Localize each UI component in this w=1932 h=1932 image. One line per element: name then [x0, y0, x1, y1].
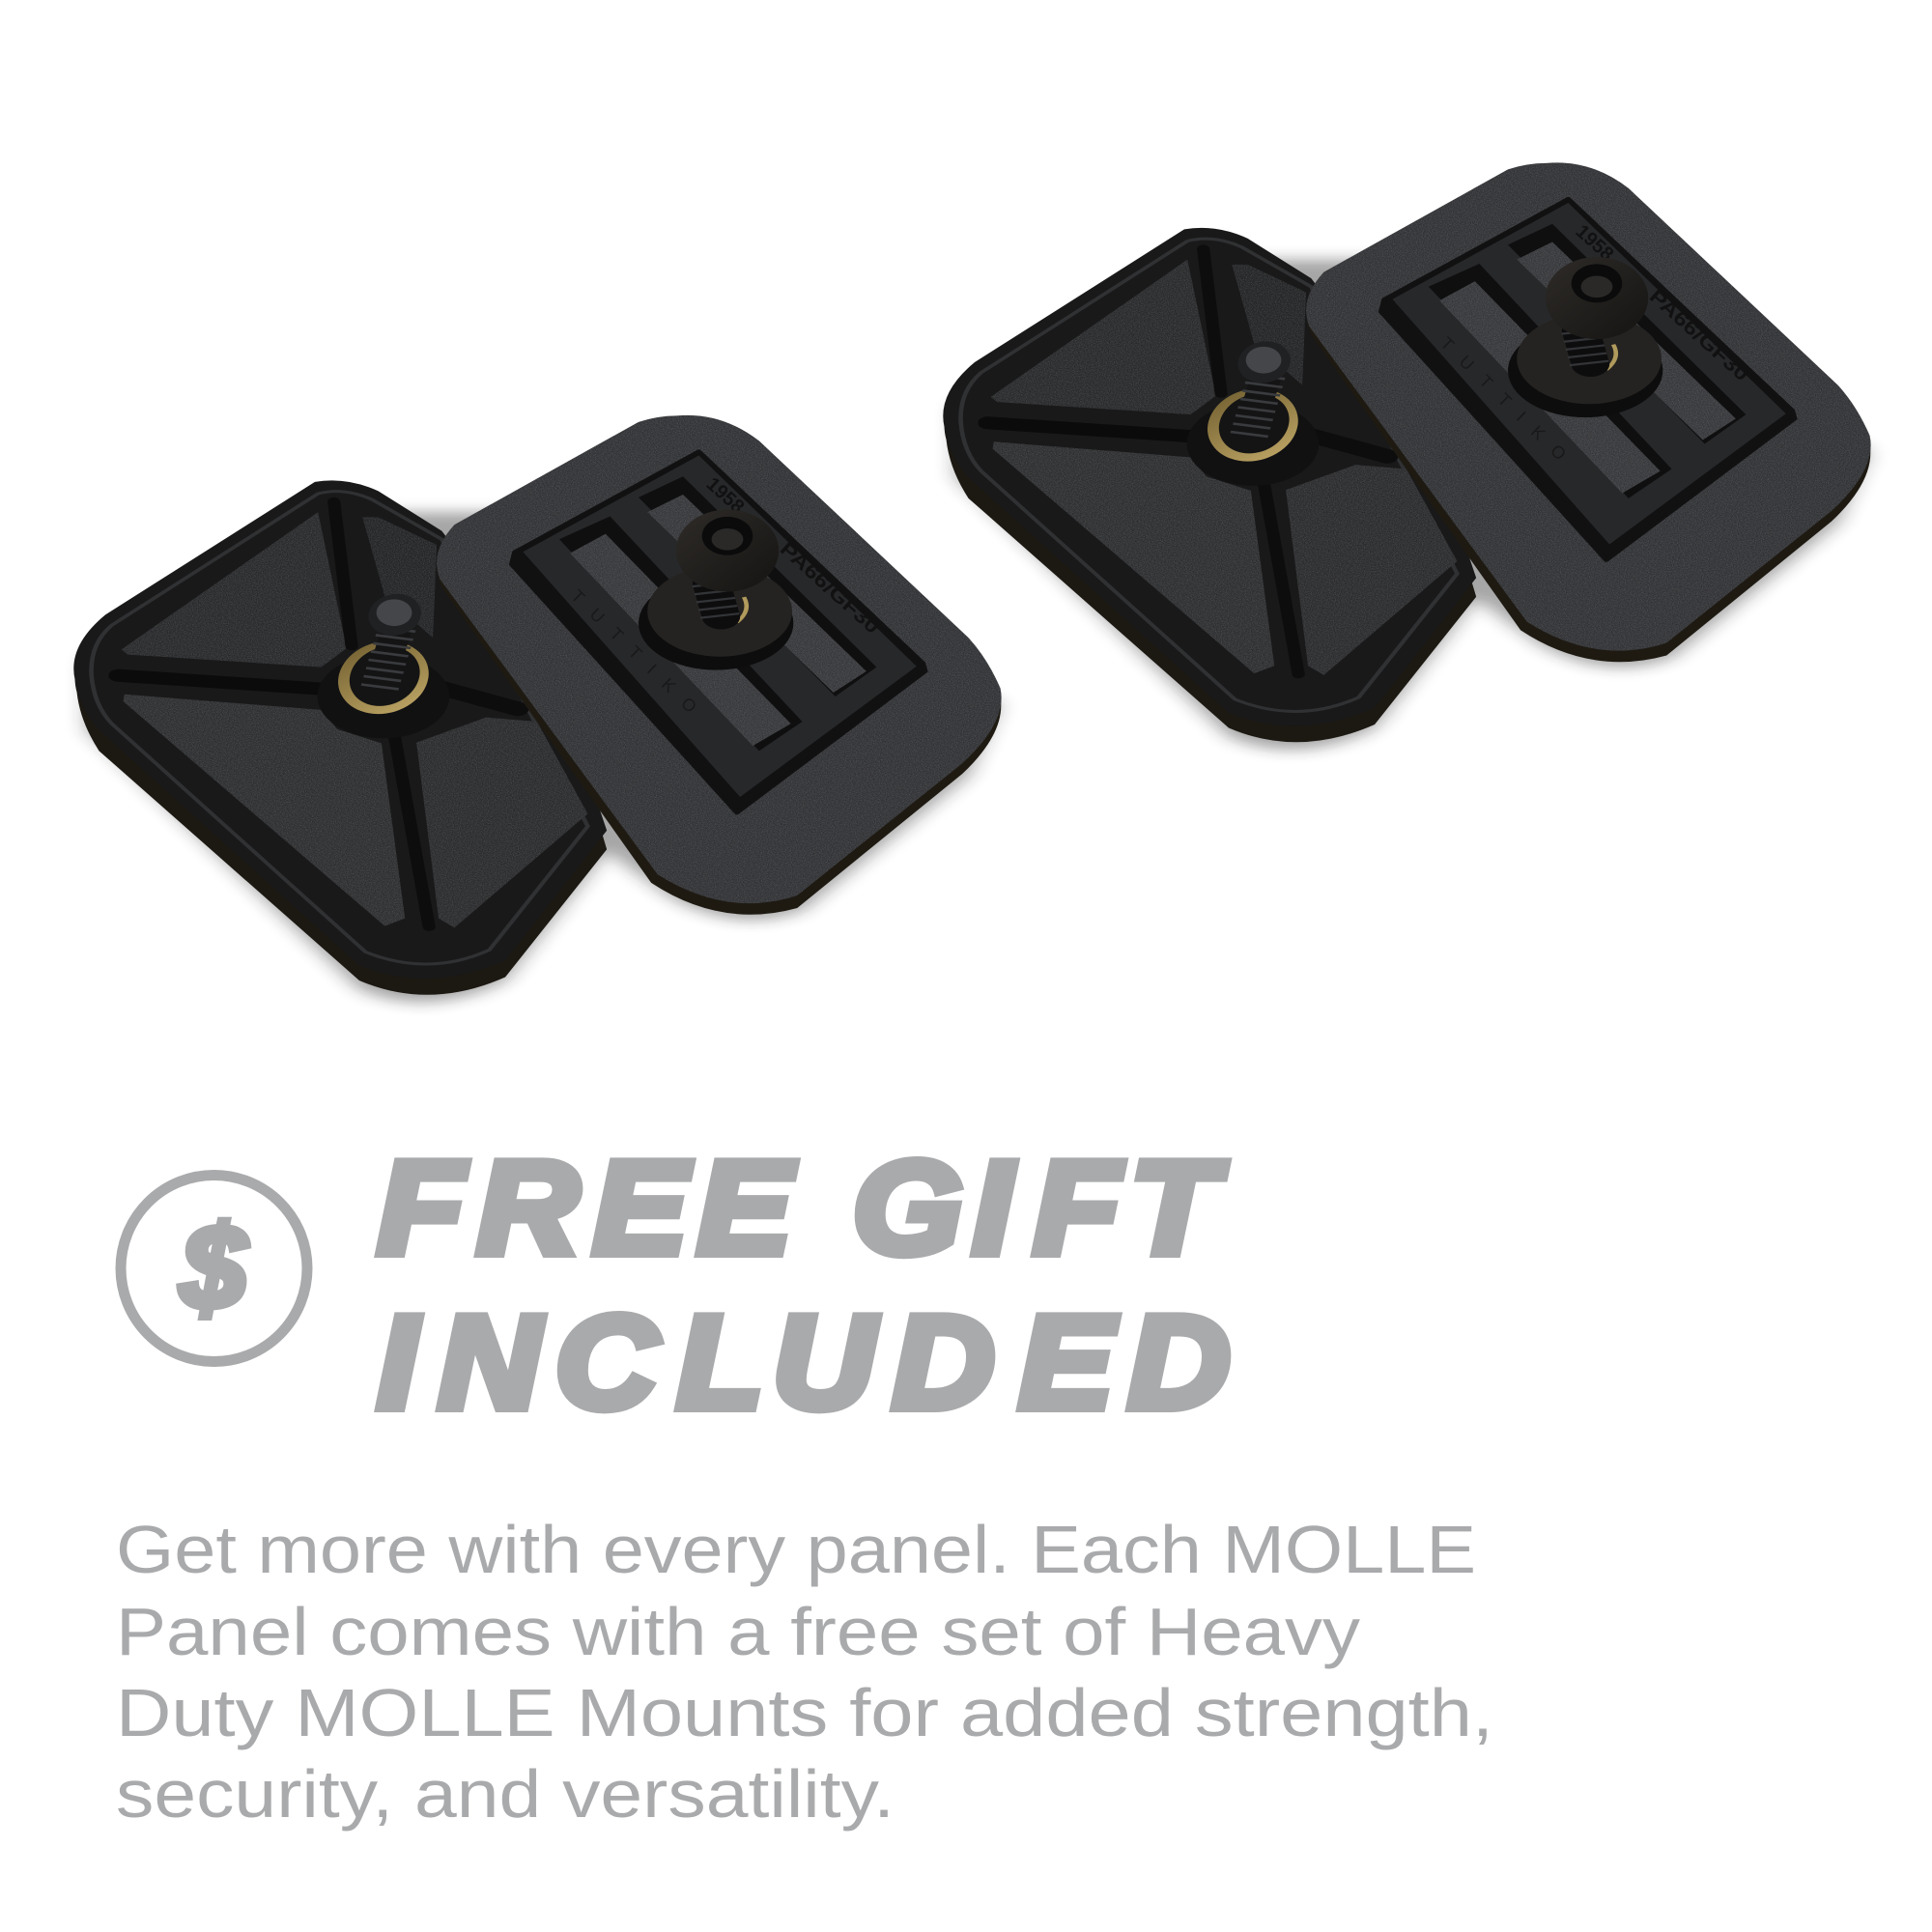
- moulded logo: TUTTIKO: [567, 586, 700, 717]
- left mount shadow: [86, 512, 1001, 1003]
- top plate: [437, 415, 1002, 903]
- top plate side wall: [438, 424, 1001, 915]
- moulded material text: PA66/GF30: [1645, 286, 1752, 385]
- base plate with ribs: [73, 480, 607, 995]
- heading: free gift included: INCLUDED: [378, 1289, 1230, 1435]
- icon: dollar sign in circle: $: [180, 1202, 247, 1333]
- top plate side wall: [1307, 171, 1870, 662]
- icon: dollar sign in circle: [121, 1175, 307, 1362]
- body text: security, and versatility.: [116, 1756, 895, 1832]
- heading: free gift included: FREE GIFT: [378, 1134, 1226, 1281]
- body text: [116, 1512, 1493, 1832]
- moulded material text: PA66/GF30: [776, 538, 883, 639]
- left mount shadow: [955, 260, 1870, 750]
- moulded code text: 1958: [702, 473, 748, 518]
- body text: Get more with every panel. Each MOLLE: [116, 1512, 1476, 1587]
- washer and hex socket screw: [639, 510, 793, 670]
- moulded code text: 1958: [1572, 221, 1617, 266]
- washer and hex socket screw: [1508, 257, 1662, 417]
- body text: Panel comes with a free set of Heavy: [116, 1594, 1360, 1669]
- product photo: right pair of MOLLE mounts: [943, 162, 1871, 750]
- body text: Duty MOLLE Mounts for added strength,: [116, 1675, 1493, 1750]
- hub with brass grommet and threaded stud: [318, 590, 449, 738]
- product photo: left pair of MOLLE mounts: [73, 415, 1002, 1003]
- base plate with ribs: [943, 228, 1476, 742]
- hub with brass grommet and threaded stud: [1187, 338, 1319, 486]
- raised slotted rectangle: [512, 451, 925, 813]
- top plate: [1306, 162, 1871, 651]
- moulded logo: TUTTIKO: [1436, 333, 1570, 464]
- raised slotted rectangle: [1381, 199, 1795, 560]
- heading: free gift included: [378, 1134, 1230, 1435]
